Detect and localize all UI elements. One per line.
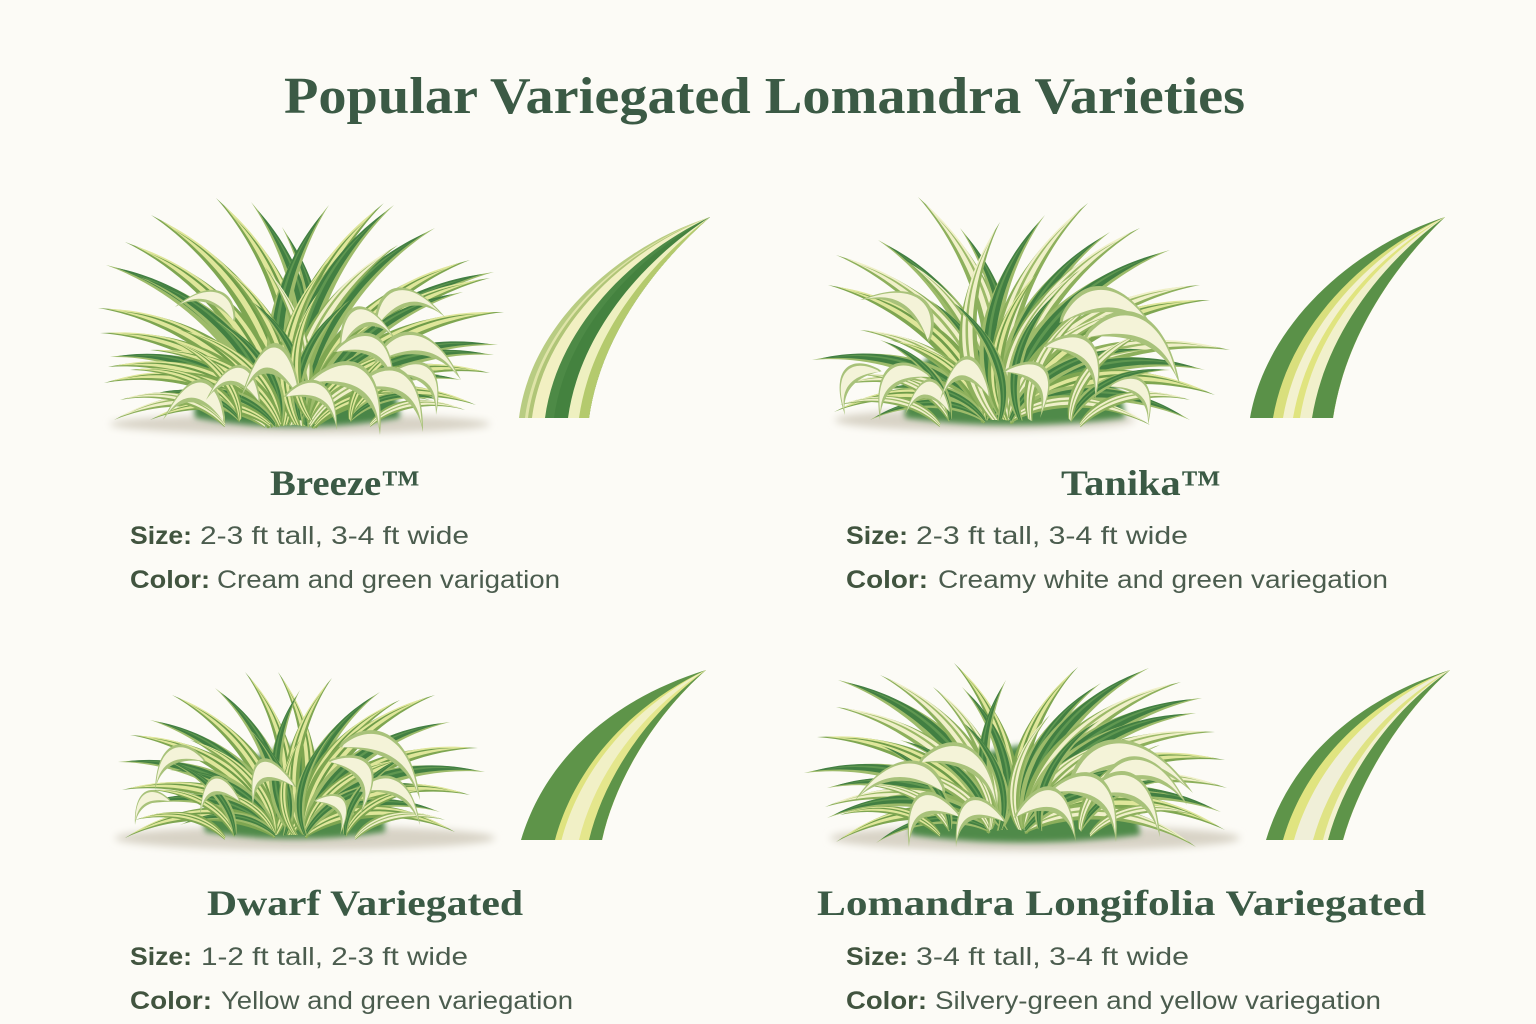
leaf detail: Dwarf Variegated: [521, 670, 706, 840]
heading: Breeze: Breeze™: [270, 463, 420, 503]
details: Lomandra Longifolia Variegated: [846, 943, 1381, 1015]
details: Tanika: Size:: [846, 522, 908, 550]
details: Lomandra Longifolia Variegated: 3-4 ft tall, 3-4 ft wide: [916, 943, 1189, 971]
details: Breeze: 2-3 ft tall, 3-4 ft wide: [200, 522, 469, 550]
details: Tanika: Color:: [846, 566, 928, 594]
details: Dwarf Variegated: Color:: [130, 987, 212, 1015]
details: Tanika: 2-3 ft tall, 3-4 ft wide: [916, 522, 1188, 550]
plant illustration: Tanika: [811, 184, 1231, 431]
leaf detail: Lomandra Longifolia Variegated: [1266, 670, 1450, 840]
heading: Lomandra Longifolia Variegated: Lomandra Longifolia Variegated: [817, 883, 1426, 923]
details: Tanika: [846, 522, 1388, 594]
plant illustration: Breeze: [96, 185, 506, 438]
panel: Tanika: [811, 184, 1445, 594]
details: Tanika: Creamy white and green variegation: [938, 566, 1388, 594]
heading: Tanika: Tanika™: [1061, 463, 1221, 503]
title: Popular Variegated Lomandra Varieties: [284, 68, 1245, 125]
leaf detail: Tanika: [1250, 217, 1445, 418]
plant illustration: Lomandra Longifolia Variegated: [803, 644, 1240, 851]
details: Dwarf Variegated: Yellow and green variegation: [221, 987, 573, 1015]
panel: Breeze: [96, 185, 710, 594]
details: Breeze: Size:: [130, 522, 192, 550]
heading: Dwarf Variegated: Dwarf Variegated: [207, 883, 523, 923]
details: Breeze: [130, 522, 560, 594]
details: Dwarf Variegated: Size:: [130, 943, 192, 971]
plant illustration: Dwarf Variegated: [115, 666, 495, 850]
panel: Dwarf Variegated: [115, 666, 706, 1015]
details: Dwarf Variegated: 1-2 ft tall, 2-3 ft wide: [201, 943, 468, 971]
details: Lomandra Longifolia Variegated: Silvery-green and yellow variegation: [935, 987, 1381, 1015]
details: Lomandra Longifolia Variegated: Size:: [846, 943, 908, 971]
leaf detail: Breeze: [519, 217, 710, 418]
details: Breeze: Color:: [130, 566, 210, 594]
panel: Lomandra Longifolia Variegated: [803, 644, 1450, 1015]
details: Breeze: Cream and green varigation: [217, 566, 560, 594]
details: Lomandra Longifolia Variegated: Color:: [846, 987, 927, 1015]
details: Dwarf Variegated: [130, 943, 573, 1015]
